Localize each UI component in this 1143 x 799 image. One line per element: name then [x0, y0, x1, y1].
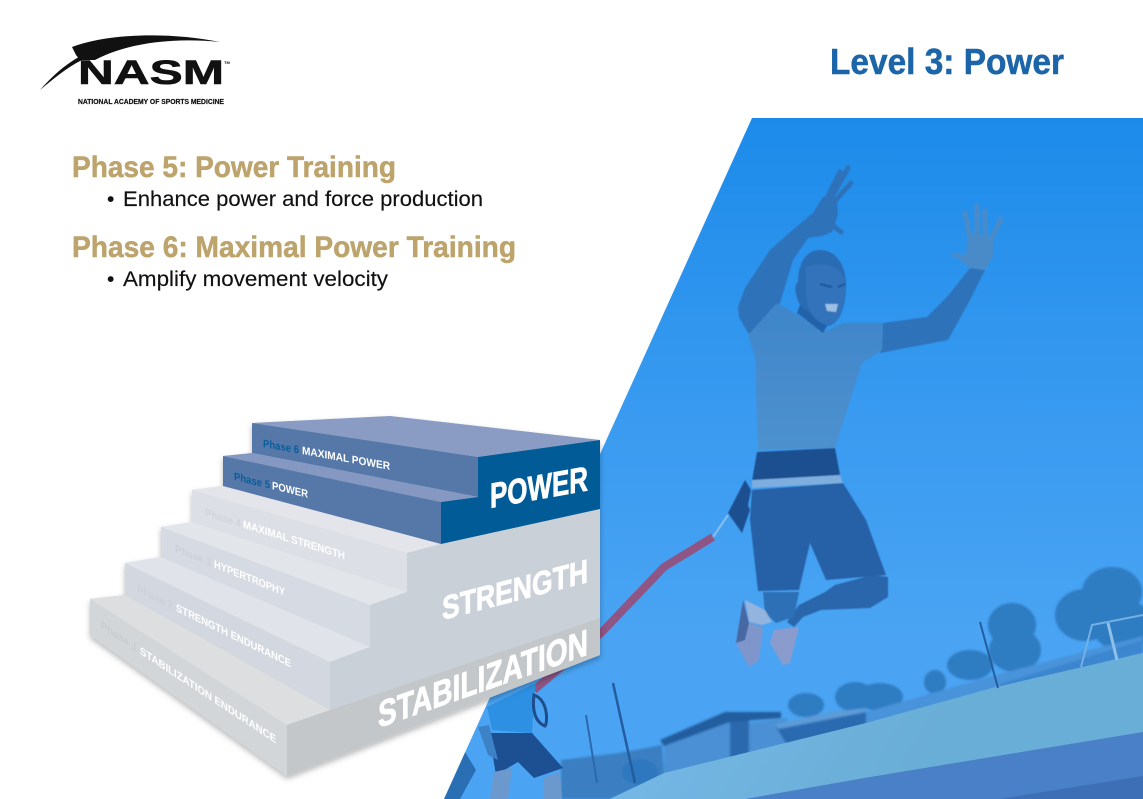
text block: phase 6 [72, 231, 516, 291]
step label: phase 2: STRENGTH ENDURANCE [176, 602, 291, 670]
step label: phase 5: Phase 5 [234, 471, 270, 492]
step label: phase 6: MAXIMAL POWER [302, 445, 390, 473]
bullet: phase 5: • [107, 188, 114, 211]
step label: phase 3 [175, 543, 285, 599]
step label: phase 3: Phase 3 [175, 543, 211, 569]
athlete right arm and hand [880, 206, 1001, 353]
step label: phase 6: Phase 6 [263, 438, 299, 456]
athlete head [795, 250, 846, 333]
staircase: OPT model [90, 416, 600, 776]
step label: phase 1: Phase 1 [101, 618, 137, 655]
logo trademark: TM [224, 60, 230, 65]
level label: STABILIZATION: STABILIZATION [378, 622, 588, 737]
ground: grass and track [610, 653, 1143, 799]
resistance band [534, 537, 713, 690]
level label: STRENGTH: STRENGTH [442, 554, 588, 628]
step label: phase 6 [263, 438, 390, 473]
bullet: phase 5: Enhance power and force production [123, 188, 483, 211]
step label: phase 1: STABILIZATION ENDURANCE [140, 644, 276, 746]
bullet: phase 6: • [107, 268, 114, 291]
bullet: phase 6: Amplify movement velocity [123, 268, 389, 291]
step label: phase 2 [137, 583, 291, 670]
athlete jumping [713, 168, 1001, 667]
logo: NASM [40, 35, 230, 106]
athlete belt [752, 448, 840, 481]
athlete harness strap [728, 480, 751, 533]
logo tagline: NATIONAL ACADEMY OF SPORTS MEDICINE [78, 99, 224, 106]
logo wordmark: NASM [78, 54, 224, 92]
background trees and buildings [561, 567, 1143, 799]
power block [223, 416, 600, 544]
step label: phase 4 [205, 507, 345, 562]
light poles and goal frame [586, 615, 1143, 783]
logo swoosh [40, 35, 220, 90]
strength block [125, 486, 600, 710]
step label: phase 5 [234, 471, 308, 501]
athlete legs and shoes [736, 575, 888, 667]
stair solids [90, 416, 600, 776]
level label: POWER: POWER [490, 460, 588, 516]
step label: phase 1 [101, 618, 276, 746]
title: Level 3: Power [830, 41, 1064, 82]
athlete left arm and hand [738, 168, 851, 335]
second person holding band [444, 683, 563, 799]
step label: phase 4: MAXIMAL STRENGTH [243, 519, 345, 562]
athlete shorts [750, 483, 886, 591]
step label: phase 2: Phase 2 [137, 583, 173, 612]
athlete shirt [748, 303, 883, 450]
step label: phase 5: POWER [272, 480, 308, 501]
step label: phase 3: HYPERTROPHY [214, 559, 285, 599]
heading: phase 5: Phase 5: Power Training [72, 151, 396, 184]
heading: phase 6: Phase 6: Maximal Power Training [72, 231, 516, 264]
stabilization block [90, 595, 600, 776]
panel: blue athlete photo [440, 118, 1143, 799]
text block: phase 5 [72, 151, 483, 211]
step label: phase 4: Phase 4 [205, 507, 242, 530]
